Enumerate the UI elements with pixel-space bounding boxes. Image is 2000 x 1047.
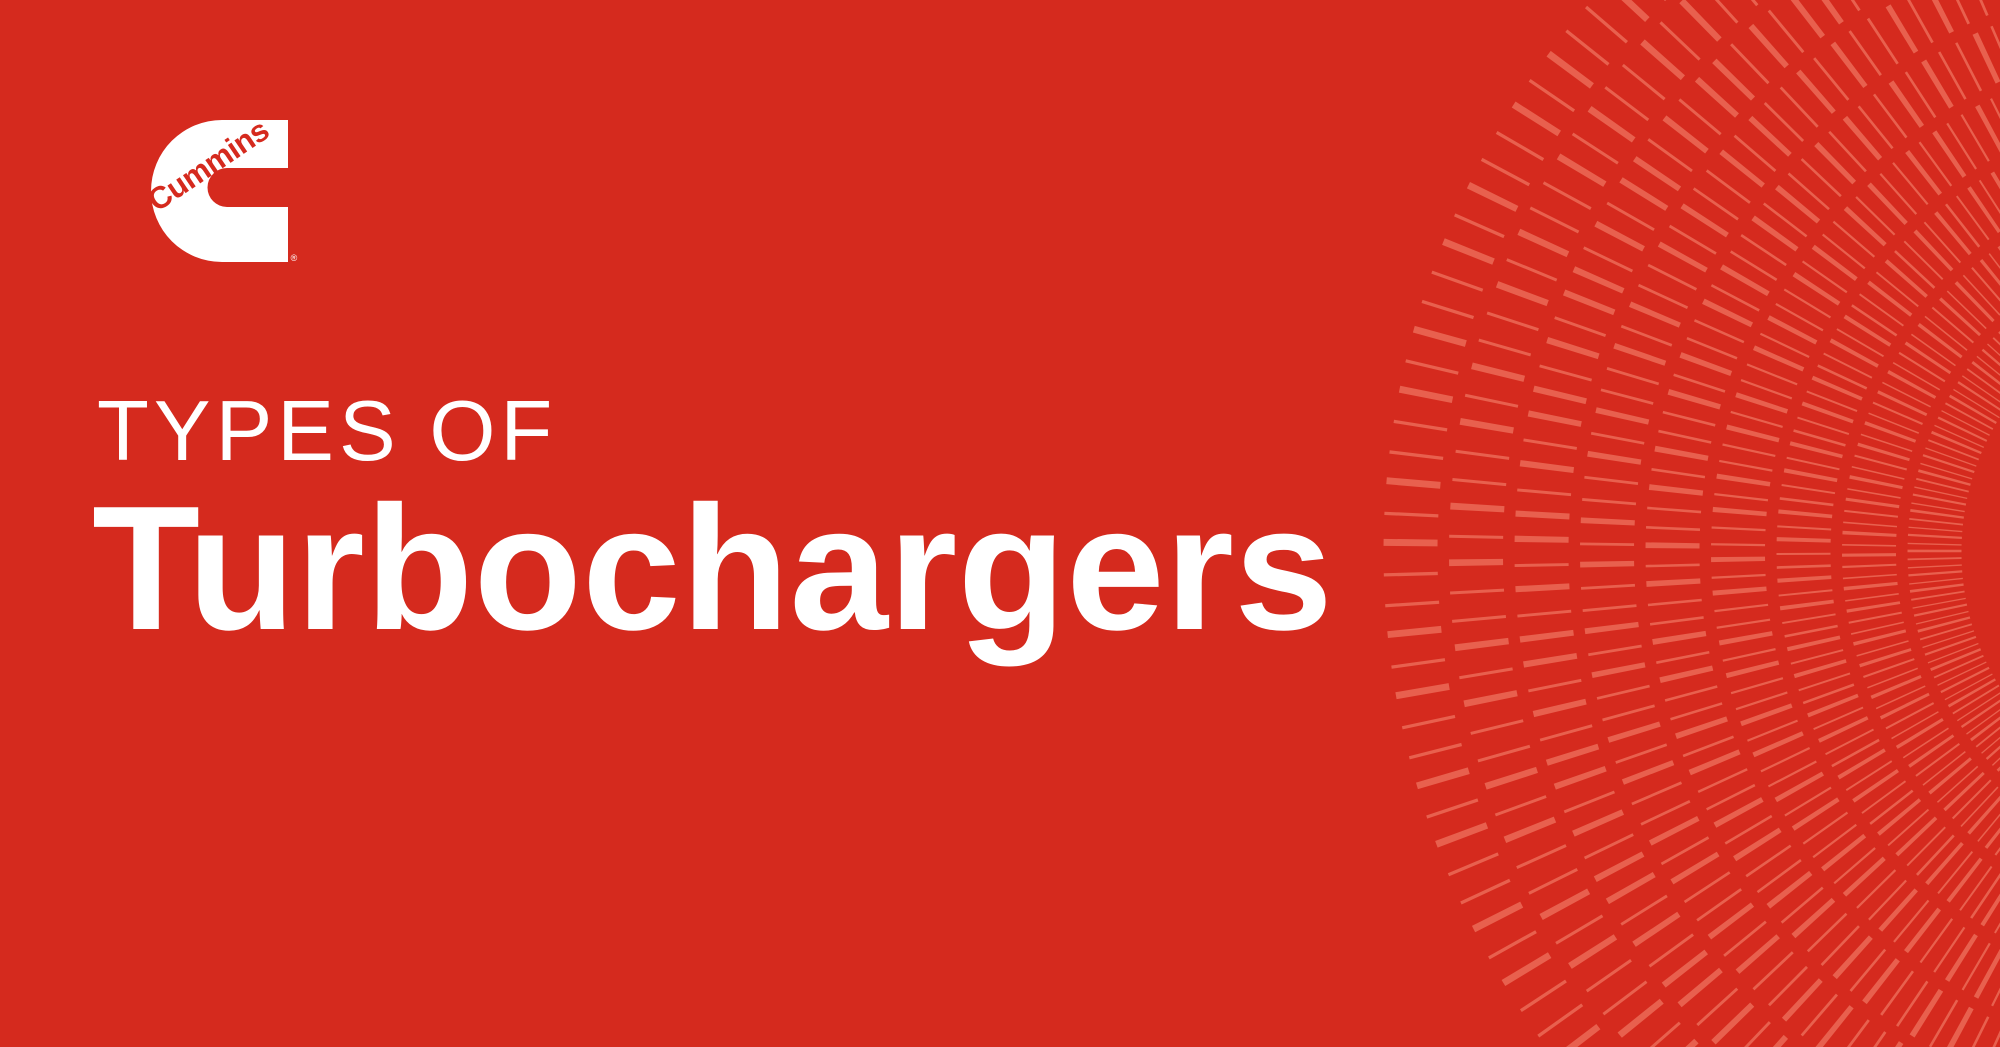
subtitle: TYPES OF	[97, 384, 557, 479]
title: Turbochargers	[92, 469, 1333, 667]
logo: Cummins: Cummins	[141, 112, 275, 218]
logo: Cummins	[141, 112, 298, 263]
logo: Cummins: ®	[291, 253, 298, 263]
